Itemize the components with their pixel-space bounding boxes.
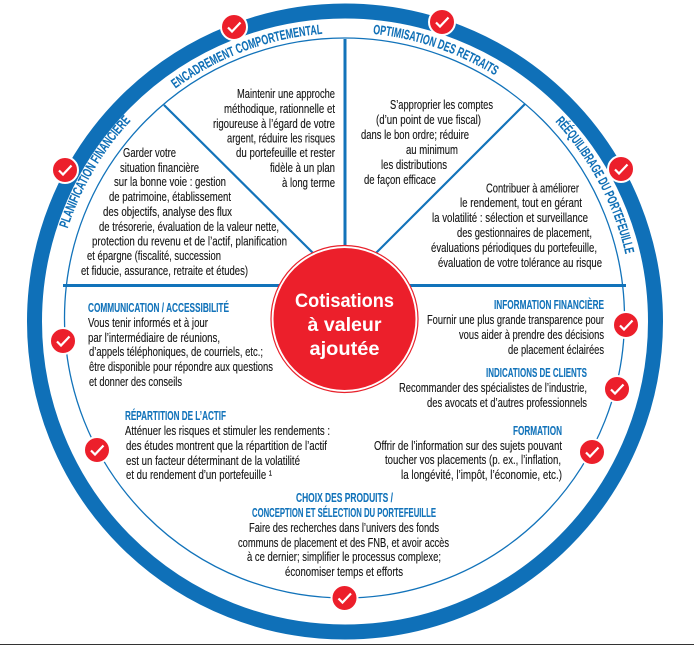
text block: choix des produits: économiser temps et efforts — [285, 564, 403, 579]
text block: répartition de l'actif: Atténuer les risques et stimuler les rendements : — [125, 423, 330, 438]
text block: formation: la longévité, l’impôt, l’économie, etc.) — [401, 467, 562, 482]
center circle — [271, 246, 418, 392]
text block: optimisation des retraits: S’approprier les comptes — [390, 97, 493, 112]
text block: formation — [374, 424, 562, 482]
text block: planification financière: protection du revenu et de l’actif, planification — [92, 234, 287, 248]
text block: communication / accessibilité: être disponible pour répondre aux questions — [89, 359, 273, 374]
curved heading: encadrement comportemental: ENCADREMENT COMPORTEMENTAL — [170, 24, 322, 88]
text block: encadrement comportemental: Maintenir une approche — [237, 86, 335, 101]
text block: rééquilibrage du portefeuille: Contribuer à améliorer — [486, 180, 579, 196]
text block: formation: Offrir de l’information sur des sujets pouvant — [374, 438, 562, 453]
text block: encadrement comportemental — [213, 86, 335, 190]
text block: choix des produits: à ce dernier; simplifier le processus complexe; — [247, 549, 441, 564]
text block: encadrement comportemental: rigoureuse à l’égard de votre — [213, 116, 335, 131]
text block: information financière — [427, 297, 604, 357]
text block: encadrement comportemental: du portefeuille et rester — [236, 145, 335, 160]
text block: communication / accessibilité: et donner des conseils — [89, 374, 182, 389]
text block: communication / accessibilité: d’appels téléphoniques, de courriels, etc.; — [89, 344, 263, 359]
text block: communication / accessibilité: Vous tenir informés et à jour — [88, 315, 208, 330]
curved heading: planification financière: PLANIFICATION FINANCIÈRE — [59, 114, 131, 228]
text block: planification financière: et fiducie, assurance, retraite et études) — [81, 263, 248, 278]
text block: communication / accessibilité: par l’intermédiaire de réunions, — [88, 330, 220, 345]
center circle: à valeur — [308, 314, 382, 336]
text block: répartition de l'actif: des études montrent que la répartition de l’actif — [126, 438, 327, 453]
center circle: ajoutée — [310, 338, 380, 360]
thin inner circle — [64, 38, 624, 598]
text block: encadrement comportemental: fidèle à un plan — [270, 160, 335, 175]
text block: rééquilibrage du portefeuille: évaluation de votre tolérance au risque — [438, 255, 602, 270]
spoke dividers — [63, 39, 626, 286]
text block: communication / accessibilité: COMMUNICATION / ACCESSIBILITÉ — [88, 300, 229, 315]
text block: optimisation des retraits: de façon efficace — [364, 172, 436, 187]
text block: planification financière: Garder votre — [123, 145, 176, 160]
text block: répartition de l'actif — [125, 408, 330, 482]
text block: planification financière: et épargne (fiscalité, succession — [87, 248, 221, 263]
text block: indications de clients: Recommander des spécialistes de l’industrie, — [399, 380, 587, 395]
text block: rééquilibrage du portefeuille: évaluations périodiques du portefeuille, — [431, 240, 597, 255]
text block: rééquilibrage du portefeuille: la volatilité : sélection et surveillance — [432, 210, 588, 225]
text block: formation: FORMATION — [513, 424, 562, 438]
text block: répartition de l'actif: RÉPARTITION DE L’ACTIF — [125, 408, 226, 423]
text block: formation: toucher vos placements (p. ex., l’inflation, — [385, 452, 561, 467]
text block: communication / accessibilité — [88, 300, 273, 389]
icon: check marks — [50, 9, 639, 611]
text block: information financière: vous aider à prendre des décisions — [459, 327, 604, 342]
text block: planification financière — [81, 145, 287, 278]
text block: optimisation des retraits: dans le bon ordre; réduire — [361, 127, 469, 142]
text block: rééquilibrage du portefeuille — [431, 180, 602, 270]
text block: optimisation des retraits: les distributions — [381, 157, 447, 172]
text block: encadrement comportemental: méthodique, rationnelle et — [224, 101, 335, 116]
text block: optimisation des retraits: au minimum — [406, 142, 458, 157]
text block: choix des produits: CHOIX DES PRODUITS / — [296, 491, 393, 505]
text block: indications de clients — [399, 366, 587, 410]
text block: planification financière: de patrimoine, établissement — [109, 189, 231, 204]
text block: répartition de l'actif: est un facteur déterminant de la volatilité — [126, 453, 300, 468]
text block: rééquilibrage du portefeuille: le rendement, tout en gérant — [460, 195, 582, 210]
text block: choix des produits: Faire des recherches dans l’univers des fonds — [249, 520, 439, 535]
text block: indications de clients: INDICATIONS DE CLIENTS — [486, 366, 587, 380]
text block: répartition de l'actif: et du rendement d’un portefeuille ¹ — [126, 467, 272, 482]
text block: encadrement comportemental: à long terme — [282, 175, 335, 190]
text block: optimisation des retraits: (d’un point de vue fiscal) — [376, 112, 481, 127]
curved heading: optimisation des retraits: OPTIMISATION DES RETRAITS — [374, 24, 499, 74]
text block: planification financière: situation financière — [120, 160, 199, 175]
text block: information financière: de placement éclairées — [508, 342, 604, 357]
text block: planification financière: des objectifs, analyse des flux — [103, 204, 232, 219]
text block: information financière: INFORMATION FINANCIÈRE — [494, 297, 604, 312]
text block: information financière: Fournir une plus grande transparence pour — [427, 312, 604, 327]
text block: choix des produits — [238, 491, 449, 579]
text block: rééquilibrage du portefeuille: des gestionnaires de placement, — [457, 225, 592, 240]
center circle: Cotisations — [295, 290, 394, 312]
text block: encadrement comportemental: argent, réduire les risques — [227, 130, 335, 146]
text block: optimisation des retraits — [361, 97, 493, 187]
curved heading: rééquilibrage du portefeuille: RÉÉQUILIBRAGE DU PORTEFEUILLE — [556, 116, 634, 254]
text block: planification financière: de trésorerie, évaluation de la valeur nette, — [99, 219, 279, 234]
text block: indications de clients: des avocats et d’autres professionnels — [427, 395, 587, 410]
text block: choix des produits: communs de placement et des FNB, et avoir accès — [238, 535, 449, 550]
text block: planification financière: sur la bonne voie : gestion — [114, 174, 226, 189]
bottom edge line — [0, 644, 694, 645]
text block: choix des produits: CONCEPTION ET SÉLECTION DU PORTEFEUILLE — [252, 505, 436, 520]
